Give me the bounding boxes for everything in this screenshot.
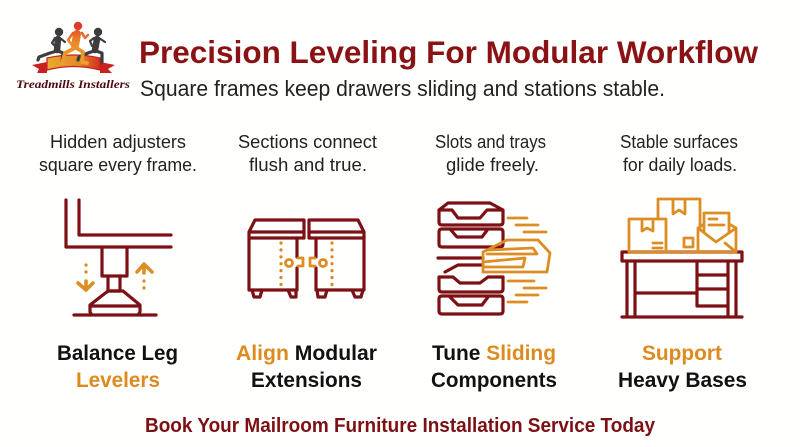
caption: slots and trays: Slots and trays xyxy=(435,132,546,152)
heading: support heavy bases xyxy=(618,341,747,392)
heading: align modular extensions: Align Modular xyxy=(236,341,378,365)
icon: center runner xyxy=(62,22,88,63)
heading: tune sliding components xyxy=(431,341,557,392)
heading: support heavy bases: Support xyxy=(642,341,722,365)
caption: stable surfaces: Stable surfaces xyxy=(620,132,738,152)
caption: slots and trays xyxy=(435,132,546,175)
icon: ribbon banner xyxy=(32,55,115,73)
heading: balance leg levelers: Levelers xyxy=(76,368,160,392)
icon: joined cabinets xyxy=(249,220,364,297)
caption: hidden adjusters: Hidden adjusters xyxy=(50,132,186,152)
footer call to action: Book Your Mailroom Furniture Installation Service Today xyxy=(145,415,656,437)
caption: sections connect: Sections connect xyxy=(238,132,377,152)
icon: leg leveler xyxy=(66,200,171,315)
logo: Treadmills Installers xyxy=(16,22,130,91)
icon: left runner xyxy=(38,28,65,62)
caption: sections connect: flush and true. xyxy=(249,155,367,175)
heading: support heavy bases: Heavy Bases xyxy=(618,368,747,392)
panel: balance leg levelers xyxy=(39,132,197,392)
icon: desk with boxes and envelope xyxy=(622,199,742,317)
panel: tune sliding components xyxy=(431,132,557,392)
caption: stable surfaces: for daily loads. xyxy=(623,155,737,175)
caption: hidden adjusters: square every frame. xyxy=(39,155,197,175)
heading: balance leg levelers: Balance Leg xyxy=(57,341,178,365)
subtitle: Square frames keep drawers sliding and stations stable. xyxy=(140,76,665,101)
panel: support heavy bases xyxy=(618,132,747,392)
heading: align modular extensions: Extensions xyxy=(251,368,362,392)
icon: right runner xyxy=(78,28,105,62)
heading: tune sliding components: Components xyxy=(431,368,557,392)
heading: align modular extensions xyxy=(236,341,378,392)
caption: stable surfaces xyxy=(620,132,738,175)
heading: tune sliding components: Tune Sliding xyxy=(432,341,556,365)
caption: hidden adjusters xyxy=(39,132,197,175)
caption: sections connect xyxy=(238,132,377,175)
heading: balance leg levelers xyxy=(57,341,178,392)
icon: sliding trays xyxy=(438,203,550,314)
panel: align modular extensions xyxy=(236,132,378,392)
caption: slots and trays: glide freely. xyxy=(446,155,539,175)
title: Precision Leveling For Modular Workflow xyxy=(139,34,758,70)
text: logo name: Treadmills Installers xyxy=(16,77,130,91)
